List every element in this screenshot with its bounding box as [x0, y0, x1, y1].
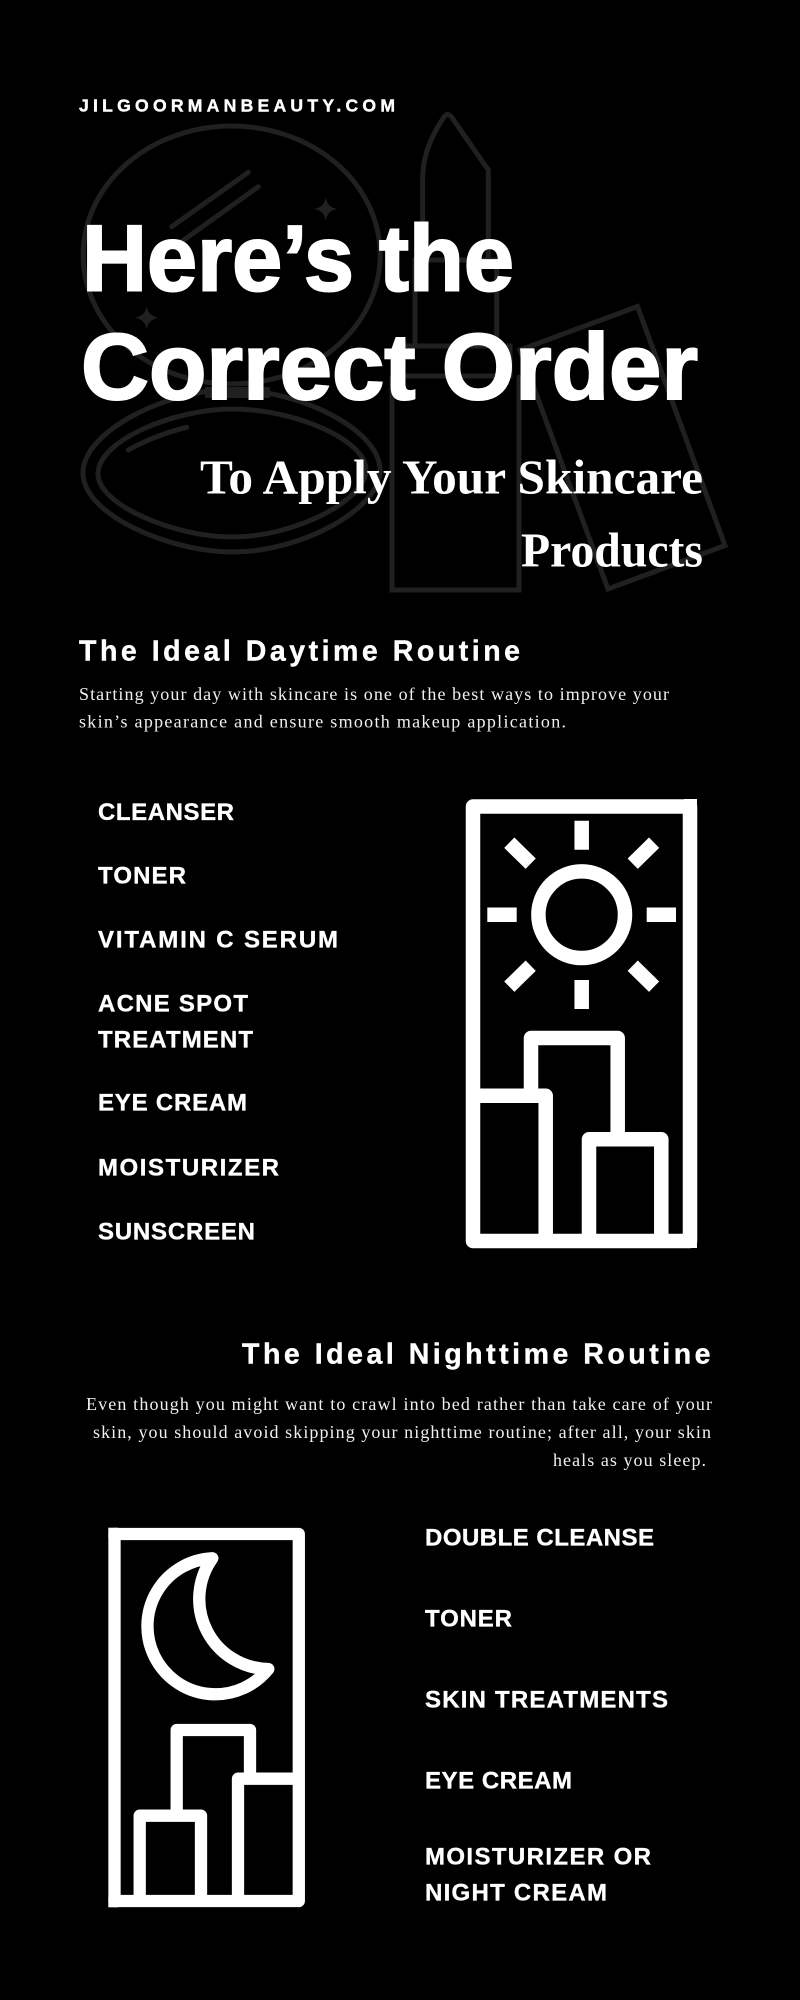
list: daytime steps: TREATMENT — [98, 1027, 253, 1054]
text block: nighttime intro: Even though you might want to crawl into bed rather than take care of your — [86, 1394, 712, 1414]
text block: daytime intro: skin’s appearance and ensure smooth makeup application. — [79, 711, 566, 731]
icon: compact case — [83, 390, 380, 552]
list: daytime steps: MOISTURIZER — [98, 1155, 279, 1182]
list: daytime steps: ACNE SPOT — [98, 991, 248, 1018]
list: nighttime steps — [425, 1524, 668, 1907]
text block: nighttime intro — [86, 1394, 712, 1470]
list: nighttime steps: NIGHT CREAM — [425, 1880, 607, 1907]
icon: sun over city — [473, 799, 697, 1248]
title: Here’s the — [82, 205, 514, 310]
background art: makeup outlines — [83, 114, 725, 590]
icon: lipstick — [392, 114, 519, 590]
list: daytime steps — [98, 799, 338, 1245]
text block: daytime intro: Starting your day with skincare is one of the best ways to improve your — [79, 684, 669, 704]
list: daytime steps: SUNSCREEN — [98, 1218, 255, 1245]
list: daytime steps: EYE CREAM — [98, 1089, 247, 1116]
subtitle — [200, 449, 703, 578]
heading: nighttime routine: The Ideal Nighttime Routine — [242, 1338, 710, 1370]
website label: JILGOORMANBEAUTY.COM — [79, 96, 395, 116]
text block: nighttime intro: heals as you sleep. — [553, 1450, 706, 1470]
subtitle: To Apply Your Skincare — [200, 449, 703, 504]
list: nighttime steps: DOUBLE CLEANSE — [425, 1524, 654, 1551]
list: nighttime steps: MOISTURIZER OR — [425, 1844, 651, 1871]
text block: nighttime intro: skin, you should avoid skipping your nighttime routine; after all, your skin — [93, 1422, 711, 1442]
icon: angled box — [520, 306, 725, 589]
icon: moon over city — [108, 1528, 299, 1907]
subtitle: Products — [521, 523, 703, 578]
title: Correct Order — [81, 314, 698, 419]
list: nighttime steps: SKIN TREATMENTS — [425, 1687, 668, 1714]
title — [81, 205, 698, 419]
list: daytime steps: VITAMIN C SERUM — [98, 926, 338, 953]
list: daytime steps: TONER — [98, 862, 186, 889]
list: nighttime steps: TONER — [425, 1606, 512, 1633]
list: nighttime steps: EYE CREAM — [425, 1768, 572, 1795]
heading: daytime routine: The Ideal Daytime Routine — [79, 636, 520, 668]
icon: round mirror — [83, 126, 380, 398]
text block: daytime intro — [79, 684, 669, 731]
list: daytime steps: CLEANSER — [98, 799, 234, 826]
